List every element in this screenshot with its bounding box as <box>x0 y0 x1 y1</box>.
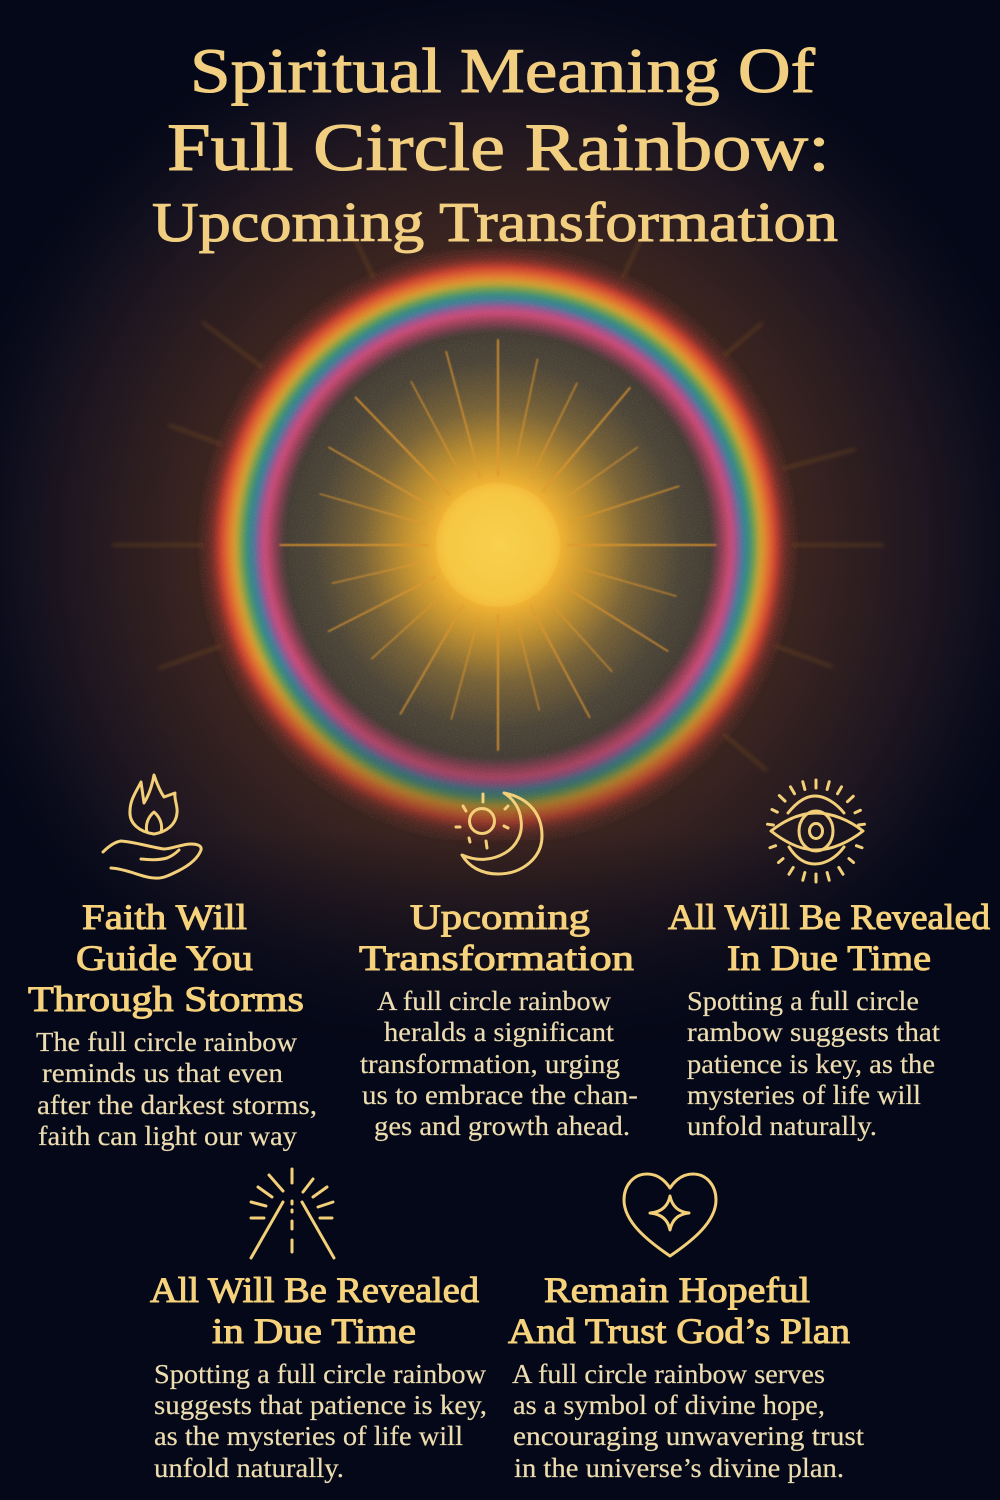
title: Spiritual Meaning Of <box>190 35 816 106</box>
heading <box>28 897 304 1019</box>
glow inside the ring <box>263 310 733 780</box>
film grain <box>190 250 810 840</box>
body text <box>36 1027 317 1151</box>
body text: rambow suggests that <box>687 1017 941 1047</box>
panel: faith will guide you <box>28 775 317 1151</box>
body text <box>687 986 941 1141</box>
icon: sun and crescent moon <box>456 793 542 874</box>
sun rays <box>280 340 716 750</box>
heading <box>508 1270 850 1351</box>
body text: as the mysteries of life will <box>154 1421 463 1451</box>
icon: flame over open hand <box>103 775 201 878</box>
outer rays <box>113 228 883 770</box>
panel: all will be revealed in due time <box>668 780 990 1141</box>
panel: all will be revealed, second row <box>150 1169 487 1483</box>
body text: patience is key, as the <box>687 1049 935 1079</box>
heading: All Will Be Revealed <box>668 897 990 937</box>
title: Full Circle Rainbow: <box>167 109 830 185</box>
body text <box>154 1359 487 1483</box>
body text: faith can light our way <box>38 1121 298 1151</box>
heading <box>150 1270 479 1351</box>
body text: A full circle rainbow <box>377 986 612 1016</box>
body text: heralds a significant <box>384 1017 615 1047</box>
body text: ges and growth ahead. <box>374 1111 630 1141</box>
body text: Spotting a full circle rainbow <box>154 1359 487 1389</box>
title <box>152 35 838 254</box>
illustration: full circle rainbow and sun <box>113 228 883 845</box>
body text: as a symbol of divine hope, <box>513 1390 825 1420</box>
body text: A full circle rainbow serves <box>512 1359 825 1389</box>
heading: All Will Be Revealed <box>150 1270 479 1310</box>
heading: In Due Time <box>727 938 931 978</box>
body text: after the darkest storms, <box>37 1090 317 1120</box>
body text: unfold naturally. <box>687 1111 877 1141</box>
heading: And Trust God’s Plan <box>508 1311 850 1351</box>
body text: unfold naturally. <box>154 1453 344 1483</box>
body text: encouraging unwavering trust <box>513 1421 865 1451</box>
heading: in Due Time <box>212 1311 416 1351</box>
body text: Spotting a full circle <box>687 986 919 1016</box>
body text: in the universe’s divine plan. <box>514 1453 844 1483</box>
panel: remain hopeful <box>508 1174 865 1483</box>
body text <box>360 986 638 1141</box>
body text: mysteries of life will <box>687 1080 921 1110</box>
heading: Through Storms <box>28 979 304 1019</box>
panel: upcoming transformation <box>359 793 638 1141</box>
body text: suggests that patience is key, <box>154 1390 487 1420</box>
heading: Remain Hopeful <box>544 1270 810 1310</box>
heading <box>668 897 990 978</box>
icon: radiant eye <box>767 780 865 882</box>
icon: radiant road <box>251 1169 334 1258</box>
heading: Guide You <box>76 938 253 978</box>
icon: heart with star <box>624 1174 716 1256</box>
heading: Faith Will <box>82 897 247 937</box>
heading: Transformation <box>359 938 634 978</box>
sun disc <box>436 483 560 607</box>
heading <box>359 897 634 978</box>
body text: transformation, urging <box>360 1049 620 1079</box>
body text <box>512 1359 865 1483</box>
heading: Upcoming <box>410 897 590 937</box>
body text: us to embrace the chan- <box>362 1080 638 1110</box>
body text: reminds us that even <box>42 1058 284 1088</box>
rainbow ring <box>198 245 798 845</box>
body text: The full circle rainbow <box>36 1027 298 1057</box>
title: Upcoming Transformation <box>152 192 838 254</box>
